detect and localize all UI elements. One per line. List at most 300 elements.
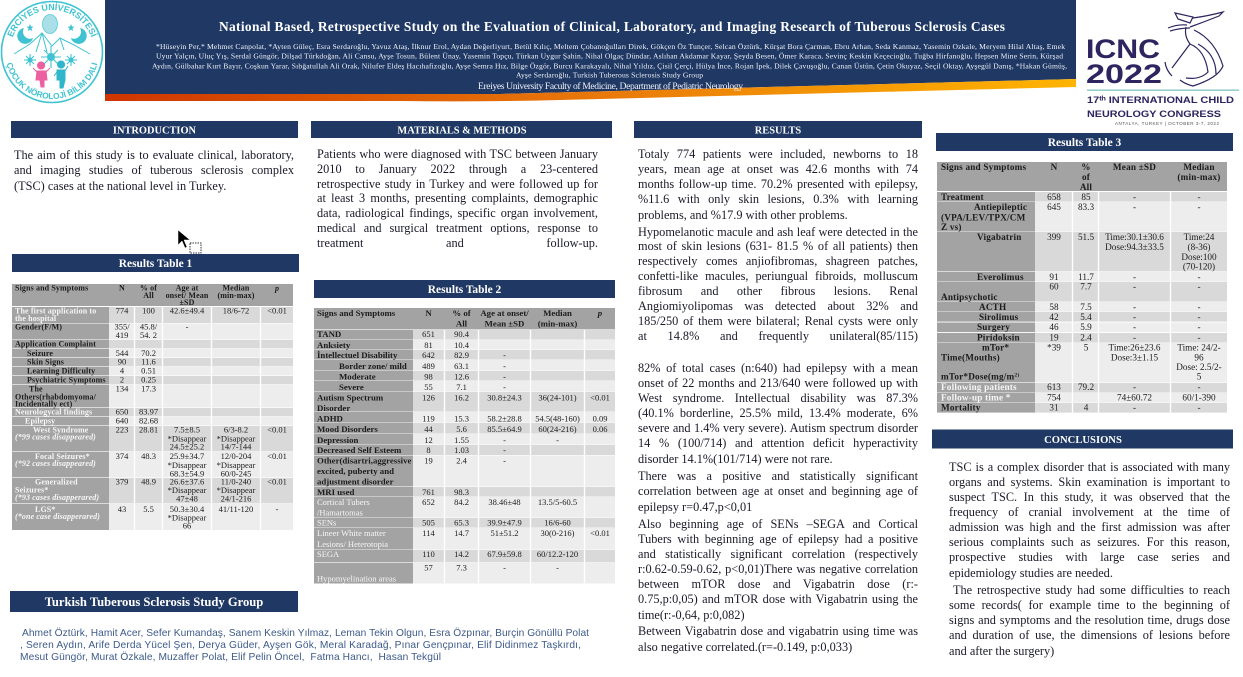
table 2 header: (min-max) — [538, 318, 577, 328]
table 1 rows: 60/0-245 — [221, 468, 251, 478]
table 1 rows: Others(rhabdomyoma/ — [15, 392, 97, 402]
table 3 rows: (8-36) — [1188, 242, 1210, 252]
table 1 rows: 18/6-72 — [223, 306, 249, 316]
text: methods body: at least 3 months, presenting complaints, demographic — [317, 191, 598, 205]
table 1 rows: - — [186, 322, 189, 332]
table 2 rows: - — [503, 562, 506, 572]
text: results paragraph 6 — [638, 624, 918, 654]
table 1 rows: 7.5±8.5 — [174, 424, 200, 434]
table 2 rows: - — [503, 372, 506, 382]
table 1 header: p — [274, 284, 279, 293]
table 3 rows: 51.5 — [1078, 232, 1094, 242]
table 2 rows: 0.06 — [593, 424, 607, 434]
table 2 rows: - — [556, 562, 559, 572]
table 3 rows: 74±60.72 — [1117, 392, 1152, 402]
table 2 header: Age at onset/ — [480, 308, 529, 318]
table 3 rows: Mortality — [941, 402, 981, 412]
table 2 rows: 1.03 — [454, 445, 469, 455]
text: results paragraph 1: months follow-up time. 70.2% presented with epilepsy, — [638, 177, 918, 191]
table 1 rows: *Disappear — [168, 434, 207, 444]
table 2 rows: <0.01 — [590, 392, 610, 402]
table 3 rows: - — [1197, 322, 1201, 332]
table 2 rows: 58.2±28.8 — [487, 414, 522, 424]
table 3 rows: 5.4 — [1080, 312, 1092, 322]
icon: mouse cursor — [178, 230, 201, 253]
table 2 rows: 30(0-216) — [540, 528, 575, 538]
table 1 rows: The first application to — [15, 306, 96, 316]
table 2 header: Mean ±SD — [485, 318, 524, 328]
table 3 rows: mTor*Dose(mg/m — [941, 372, 1014, 382]
heading: conclusions — [932, 430, 1233, 448]
table 1 rows: 134 — [116, 384, 129, 394]
table 3 rows: - — [1197, 202, 1201, 212]
text: conclusions paragraph 1: serious complaints such as seizures. For this reason, — [949, 535, 1230, 549]
table 3 rows: - — [1197, 282, 1201, 292]
table 3 rows: - — [1197, 402, 1201, 412]
text: methods body: 2010 to January 2022 through a 23-centered — [317, 162, 598, 176]
logo: ICNC 2022 congress: ICNC — [1086, 34, 1160, 64]
table 1 rows: 650 — [116, 406, 128, 416]
table 3 header: of — [1082, 172, 1091, 182]
text: study group names: Mesut Güngör, Murat Özkale, Muzaffer Polat, Elif Pelin Öncel, Fatma Hancı, Hasan Tekgül — [20, 651, 441, 663]
table 1 rows: The — [29, 384, 43, 394]
table 2 rows: 55 — [424, 382, 433, 392]
table 2 rows: Anksiety — [317, 340, 351, 350]
table 3 rows: Everolimus — [977, 272, 1024, 282]
table 1 rows: 83.97 — [139, 406, 158, 416]
table 3 rows: Follow-up time * — [941, 392, 1011, 402]
table 3 rows: Dose:100 — [1181, 252, 1217, 262]
table 3 rows: 645 — [1047, 202, 1061, 212]
table 2 rows: 7.3 — [456, 562, 467, 572]
table 2 rows: Hypomyelination areas — [317, 574, 396, 584]
panel: study group — [10, 591, 589, 663]
text: results paragraph 3: 14 % (100/714) and attention deficit hyperactivity — [638, 436, 918, 450]
text: results paragraph 3: (40.1% borderline, 25.5% mild, 13.4% moderate, 6% — [638, 406, 918, 420]
table 2 rows: 65.3 — [454, 518, 469, 528]
text: results paragraph 3: severe and 1.4% very severe). Autism spectrum disorder — [638, 421, 918, 435]
table 2 rows: 90.4 — [454, 329, 470, 339]
table 2 rows: 54.5(48-160) — [535, 414, 580, 424]
table 2 rows: - — [503, 350, 506, 360]
table 1 header: onset/ Mean — [166, 291, 209, 300]
table 2 rows: 505 — [422, 518, 435, 528]
table 2 rows: /Hamartomas — [317, 508, 363, 518]
table 3 rows: Piridoksin — [977, 332, 1020, 342]
text: results paragraph 4: There was a positive and statistically significant — [638, 469, 918, 483]
text: results paragraph 1: %11.6 with only skin lesions, 0.3% with learning — [638, 192, 918, 206]
table 1 rows: 47±48 — [176, 494, 198, 504]
table 3 rows: - — [1197, 382, 1201, 392]
table 3 rows: - — [1197, 272, 1201, 282]
panel: introduction — [11, 121, 298, 193]
text: results paragraph 5: Also beginning age of SENs –SEGA and Cortical — [638, 517, 918, 531]
table 2 rows: 1.55 — [454, 435, 469, 445]
table 1 header: Median — [223, 284, 250, 292]
table 3 rows: 4 — [1084, 402, 1089, 412]
table 2 rows: 82.9 — [454, 350, 469, 360]
table 2 rows: Moderate — [339, 372, 376, 382]
table 2 rows: - — [503, 435, 506, 445]
table 3 rows: - — [1133, 322, 1136, 332]
panel: materials and methods — [311, 121, 612, 252]
table 3 rows: Time:26±23.6 — [1109, 342, 1161, 352]
authors — [152, 42, 1067, 80]
table 3 rows: Vigabatrin — [977, 232, 1022, 242]
table 2 rows: Cortical Tubers — [317, 497, 370, 507]
table 2 rows: 36(24-101) — [538, 392, 577, 402]
table 3 rows: Z vs) — [941, 222, 962, 232]
table 3 rows: 754 — [1047, 392, 1061, 402]
text: results paragraph 4 — [638, 469, 918, 514]
table 3 header: (min-max) — [1177, 172, 1221, 182]
title: National Based, Retrospective Study on the Evaluation of Clinical, Laboratory, and Imaging Research of Tuberous Sclerosis Cases — [219, 19, 1005, 34]
table 3 rows: 60 — [1049, 282, 1059, 292]
table 1 rows: 12/0-204 — [221, 451, 252, 461]
table 2 rows: 12.6 — [454, 372, 469, 382]
table 3 rows: - — [1133, 402, 1136, 412]
table 3 rows: (70-120) — [1183, 262, 1215, 272]
table 2 rows: 0.09 — [593, 414, 607, 424]
table 1 rows: 24.5±25.2 — [170, 442, 204, 452]
table 1 rows: 26.6±37.6 — [170, 476, 204, 486]
table 3 rows: Time:30.1±30.6 — [1105, 232, 1164, 242]
text: conclusions paragraph 1: TSC is a complex disorder that is associated with many — [949, 460, 1230, 474]
table 1 rows: Seizures* — [15, 486, 48, 494]
table 1 rows: 48.3 — [141, 451, 156, 461]
table 2 rows: Severe — [339, 382, 364, 392]
table 3 rows: - — [1133, 192, 1136, 202]
table 2 rows: adjustment disorder — [317, 476, 394, 486]
table 2 header — [314, 308, 615, 329]
table 3 rows: 83.3 — [1078, 202, 1094, 212]
text: conclusions paragraph 2: some records( for example time to the beginning of — [949, 598, 1230, 612]
table 2 rows: 14.2 — [454, 549, 469, 559]
table 2 rows: Lineer White matter — [317, 528, 386, 538]
heading: introduction — [11, 121, 298, 138]
text: results paragraph 3: disorder 14.1%(101/714) were not rare. — [638, 452, 833, 466]
table 1 rows: <0.01 — [267, 424, 287, 434]
table 2 rows: - — [503, 382, 506, 392]
table 1 rows: Neurologycal findings — [15, 408, 92, 416]
panel: conclusions — [932, 430, 1233, 658]
table 2 header: All — [456, 318, 468, 328]
table 2 header: Signs and Symptoms — [317, 308, 396, 318]
text: conclusions paragraph 2: and duration of use, the dimensions of lesions before — [949, 628, 1230, 642]
text: results paragraph 2: fibrosum and other fibrous lesions. Renal — [638, 284, 918, 298]
table 1 rows: (*99 cases disappeared) — [15, 432, 96, 442]
table 1 rows: *Disappear — [168, 512, 207, 522]
table 2 rows: 652 — [422, 497, 435, 507]
table 2 rows: SENs — [317, 518, 336, 528]
table 2 rows: 16/6-60 — [544, 518, 571, 528]
table 2 rows: Mood Disorders — [317, 424, 378, 434]
heading: study group — [10, 591, 298, 612]
logo: ICNC 2022 congress — [1086, 12, 1239, 126]
text: methods body: data, radiological findings, specific organ involvement, — [317, 206, 598, 220]
heading: introduction: INTRODUCTION — [113, 126, 197, 136]
table 1 header: % of — [140, 284, 157, 292]
table 1 rows: 66 — [183, 520, 191, 530]
table 1 header: Age at — [176, 284, 199, 292]
table 2 rows: 14.7 — [454, 528, 469, 538]
table 3 rows: Surgery — [977, 322, 1010, 332]
table 3 rows: Treatment — [941, 192, 985, 202]
table 1 rows: 43 — [118, 504, 126, 514]
heading: results table 2 — [314, 280, 615, 298]
table 1 rows: 68.3±54.9 — [170, 468, 204, 478]
table 2 rows: 12 — [424, 435, 433, 445]
table 2 rows: TAND — [317, 329, 341, 339]
table 3 rows: (VPA/LEV/TPX/CM — [941, 212, 1026, 222]
logo: ICNC 2022 congress: NEUROLOGY CONGRESS — [1087, 109, 1222, 120]
text: results paragraph 4: epilepsy r=0.47,p<0,01 — [638, 500, 752, 514]
text: results paragraph 5: between mTOR dose and Vigabatrin dose (r:- — [638, 577, 918, 591]
table 3 rows: *39 — [1047, 342, 1061, 352]
table 3 header — [937, 162, 1227, 192]
table 3 rows: ACTH — [979, 302, 1006, 312]
logo: ICNC 2022 congress: 17ᵗʰ INTERNATIONAL CHILD — [1087, 95, 1234, 106]
affiliation: Ereiyes University Faculty of Medicine, Department of Pediatric Neurology — [478, 81, 743, 92]
table 2 rows — [314, 329, 615, 584]
table 2 rows: - — [503, 456, 506, 466]
table 1 rows: 379 — [116, 476, 128, 486]
table 3 rows: Time:24 — [1184, 232, 1215, 242]
table 3 rows: Dose:3±1.15 — [1111, 352, 1158, 362]
table 1 header: (min-max) — [217, 291, 255, 300]
table 3 rows: Dose:94.3±33.5 — [1105, 242, 1164, 252]
authors: Ayşe Serdaroğlu, Turkish Tuberous Sclerosis Study Group — [516, 70, 703, 80]
table 2 rows: 761 — [422, 487, 435, 497]
table 1 rows: 82.68 — [139, 416, 158, 426]
heading: results table 1: Results Table 1 — [119, 258, 193, 270]
table 3 rows: Antipsychotic — [941, 292, 998, 302]
heading: results table 2: Results Table 2 — [428, 284, 502, 296]
table 1 rows: 6/3-8.2 — [224, 424, 248, 434]
table 3 rows: - — [1133, 332, 1136, 342]
table 1 rows: 14/7-144 — [221, 442, 252, 452]
table 3 rows: 2.4 — [1080, 332, 1092, 342]
text: results paragraph 2: most of skin lesions (631- 81.5 % of all patients) then — [638, 239, 918, 253]
table 1 header: ±SD — [180, 298, 195, 307]
text: results paragraph 2: Hypomelanotic macule and ash leaf were detected in the — [638, 225, 918, 239]
table 2 rows: excited, puberty and — [317, 466, 394, 476]
text: results paragraph 1: problems, and %17.9 with other problems. — [638, 208, 848, 222]
table 3 rows: - — [1197, 302, 1201, 312]
table 3 rows: 31 — [1049, 402, 1059, 412]
authors: Uyur Yalçın, Uluç Yış, Serdal Güngör, Dilşad Türkdoğan, Ali Cansu, Ayşe Tosun, Bülent Ünay, Yasemin Topçu, Türkan Uygur Şahin, Nihal Olgaç Dündar, Aslıhan Akdamar Kayar, Şeyda Besen, Ömer Karaca, Sevinç Keskin Keçecioğlu, Tuğba Hirfanoğlu, Hepsen Mine Serin, Kürşad — [156, 52, 1063, 60]
table 3 header: % — [1081, 162, 1091, 172]
text: study group names: Ahmet Öztürk, Hamit Acer, Sefer Kumandaş, Sanem Keskin Yılmaz, Leman Tekin Olgun, Esra Özpınar, Burçin Gönüllü Polat — [22, 627, 589, 639]
table 3 rows: 5.9 — [1080, 322, 1092, 332]
table 1 rows: 774 — [116, 306, 129, 316]
text: conclusions paragraph 1: suspect TSC. In this study, it was observed that the — [949, 490, 1230, 504]
table 1 rows: 100 — [142, 306, 155, 316]
table 1 rows: *Disappear — [168, 460, 207, 470]
table 2 header: N — [425, 308, 432, 318]
text: methods body — [317, 147, 598, 252]
table 1 rows: Learning Difficulty — [27, 366, 95, 376]
logo: ICNC 2022 congress: 2022 — [1086, 59, 1162, 89]
header banner — [105, 0, 1076, 101]
table 2 rows: 15.3 — [454, 414, 469, 424]
text: results paragraph 5: time(r:-0,64, p:0,082) — [638, 608, 745, 622]
panel: results table 2 — [314, 280, 615, 584]
text: conclusions paragraph 1 — [949, 460, 1230, 580]
text: introduction body — [14, 148, 294, 193]
heading: study group: Turkish Tuberous Sclerosis Study Group — [45, 595, 263, 609]
text: methods body: retrospective study in Turkey and were followed up for — [317, 177, 598, 191]
table 3 rows: - — [1197, 312, 1201, 322]
text: methods body: treatment and follow-up. — [317, 236, 598, 250]
heading: results: RESULTS — [755, 126, 801, 136]
table 3 rows: - — [1133, 202, 1136, 212]
table 3 rows: mTor* — [982, 342, 1009, 352]
table 1 rows: 25.9±34.7 — [170, 451, 204, 461]
table 3 rows: 46 — [1049, 322, 1059, 332]
table 2 rows: 51±51.2 — [490, 528, 519, 538]
text: results paragraph 2: at 14.8% and frequently unilateral(85/115) — [638, 329, 918, 343]
table 2 rows: 114 — [422, 528, 435, 538]
table 2 rows: Other(disartri,aggressive — [317, 456, 411, 466]
table 2 rows: MRI used — [317, 487, 354, 497]
table 2 rows: Decreased Self Esteem — [317, 445, 402, 455]
table 3 rows: 11.7 — [1078, 272, 1094, 282]
text: results paragraph 5: and statistically significant correlation (respectively — [638, 547, 918, 561]
table 1 rows: <0.01 — [267, 451, 287, 461]
table 3 rows: - — [1197, 332, 1201, 342]
table 1 rows: 223 — [116, 424, 128, 434]
table 3 rows: - — [1133, 302, 1136, 312]
table 2 rows: 8 — [426, 445, 431, 455]
table 1 — [12, 284, 293, 530]
table 2 rows: 2.4 — [456, 456, 468, 466]
text: results paragraph 2: 185/250 of them were bilateral; Renal cysts were only — [638, 314, 918, 328]
table 2 rows: 85.5±64.9 — [487, 424, 522, 434]
table 2 rows: Lesions/ Heterotopia — [317, 539, 388, 549]
authors: Aydın, Gülbahar Kurt Bayır, Coşkun Yarar, Sıbğatullah Ali Orak, Nilufer Eldeş Hacıhafizoğlu, Ayşe Semra Hız, Bilge Özgör, Burcu Karakayalı, Nihal Yıldız, Çisil Çerçi, Hülya İnce, Rojan İpek, Dilek Çavuşoğlu, Canan Üstün, Çetin Okuyaz, Seçil Oktay, Ayşegül Danış, *Hakan Gümüş, — [152, 62, 1067, 70]
table 1 rows: <0.01 — [267, 306, 287, 316]
table 2 rows: Autism Spectrum — [317, 392, 384, 402]
text: results paragraph 3: onset of 22 months and 213/640 were followed up with — [638, 376, 918, 390]
table 2 rows: 7.1 — [456, 382, 467, 392]
table 2 rows: - — [503, 445, 506, 455]
table 1 rows: the hospital — [15, 314, 57, 323]
table 1 rows: Skin Signs — [27, 358, 64, 366]
text: conclusions paragraph 1: admission was high and the first admission was after — [949, 520, 1230, 534]
panel: results table 3 — [936, 133, 1233, 413]
table 1 rows: 24/1-216 — [221, 494, 251, 504]
text: results paragraph 5: 0.75,p:0,05) and mTOR dose with Vigabatrin using the — [638, 592, 918, 606]
table 1 rows: 42.6±49.4 — [170, 306, 205, 316]
text: conclusions paragraph 1: organs and systems. Skin examination is important to — [949, 475, 1230, 489]
logo: Erciyes University pediatric neurology: ÇOCUK NÖROLOJİ BİLİM DALI — [6, 62, 98, 99]
table 3 — [937, 162, 1227, 413]
table 3 rows: 42 — [1049, 312, 1059, 322]
table 1 rows: 355/ — [114, 322, 130, 332]
text: results paragraph 1: Totaly 774 patients were included, newborns to 18 — [638, 147, 918, 161]
table 3 rows: Sirolimus — [979, 312, 1019, 322]
text: conclusions paragraph 2: and after the surgery) — [949, 644, 1054, 658]
text: results paragraph 3: 82% of total cases (n:640) had epilepsy with a mean — [638, 361, 918, 375]
table 1 rows: 70.2 — [141, 348, 156, 358]
table 3 rows: - — [1133, 282, 1136, 292]
text: results paragraph 5 — [638, 517, 918, 622]
table 3 rows: Time(Mouths) — [941, 352, 1000, 362]
table 1 rows: *Disappear — [217, 434, 256, 444]
table 1 rows: 28.81 — [139, 424, 158, 434]
text: conclusions paragraph 2: The retrospective study had some difficulties to reach — [953, 583, 1230, 597]
table 1 rows: 4 — [120, 366, 125, 376]
table 1 header: Signs and Symptoms — [15, 284, 88, 292]
table 1 rows: (*92 cases disappeared) — [15, 459, 96, 468]
text: conclusions paragraph 1: epidemiology studies are needed. — [949, 566, 1113, 580]
table 1 rows: <0.01 — [267, 476, 287, 486]
table 3 rows: - — [1133, 312, 1136, 322]
table 3 rows: 5 — [1084, 342, 1089, 352]
table 2 rows: İntellectuel Disability — [317, 350, 398, 360]
text: results paragraph 5: r:0.62-0.59-0.62, p<0,01)There was negative correlation — [638, 562, 918, 576]
table 2 rows: 13.5/5-60.5 — [538, 497, 577, 507]
authors: *Hüseyin Per,* Mehmet Canpolat, *Ayten Güleç, Esra Serdaroğlu, Yavuz Ataş, İlknur Erol, Aydan Değerliyurt, Betül Kılıç, Meltem Çobanoğulları Direk, Gökçen Öz Tunçer, Selcan Öztürk, Kürşat Bora Çarman, Ebru Arhan, Seda Kanmaz, Yasemin Ozkale, Meryem Hilal Altaş, Emek — [156, 42, 1065, 51]
table 1 header: All — [143, 291, 154, 300]
table 1 rows: 419 — [116, 330, 128, 340]
table 2 rows: 63.1 — [454, 361, 469, 371]
table 2 rows: 38.46±48 — [488, 497, 521, 507]
table 3 rows: 7.7 — [1080, 282, 1092, 292]
panel: results — [634, 121, 922, 654]
table 2 rows: 57 — [424, 562, 433, 572]
table 2 rows: 16.2 — [454, 392, 469, 402]
table 2 rows: 642 — [422, 350, 435, 360]
text: results paragraph 1: years, mean age at onset was 42.6 months with 74 — [638, 162, 918, 176]
table 3 rows: Time: 24/2- — [1177, 342, 1221, 352]
table 1 rows: - — [276, 504, 279, 514]
table 1 rows: 374 — [116, 451, 129, 461]
table 3 rows: 19 — [1049, 332, 1059, 342]
text: results paragraph 6: Between Vigabatrin dose and vigabatrin using time was — [638, 624, 918, 638]
text: conclusions paragraph 1: prospective studies with large case series and — [949, 550, 1230, 564]
table 2 rows: 98 — [424, 372, 433, 382]
logo: ICNC 2022 congress: ANTALYA, TURKEY | OCTOBER 3-7, 2022 — [1115, 121, 1219, 126]
table 1 rows: 54. 2 — [140, 330, 157, 340]
table 3 rows: Following patients — [941, 382, 1017, 392]
table 1 rows: Incidentally ect) — [15, 400, 73, 408]
text: introduction body: (TSC) cases at the national level in Turkey. — [14, 179, 226, 193]
text: introduction body: and imaging studies of tuberous sclerosis complex — [14, 163, 294, 177]
text: results paragraph 2: confetti-like macules, periungual fibroids, molluscum — [638, 269, 918, 283]
table 2 rows: 98.3 — [454, 487, 469, 497]
table 2 rows: 39.9±47.9 — [487, 518, 522, 528]
table 3 rows: 399 — [1047, 232, 1061, 242]
text: study group names: , Seren Aydın, Arife Derda Yücel Şen, Derya Güder, Ayşen Gök, Meral Karadağ, Pınar Gençpınar, Elif Didinmez Taşkırdı, — [20, 640, 581, 651]
table 3 rows: 85 — [1081, 192, 1091, 202]
text: conclusions paragraph 2 — [949, 583, 1230, 658]
table 3 rows: 60/1-390 — [1182, 392, 1216, 402]
table 3 header: Signs and Symptoms — [941, 162, 1027, 172]
table 2 rows: - — [503, 361, 506, 371]
table 2 — [314, 308, 615, 584]
text: conclusions paragraph 1: frequency of cranial involvement at the time of — [949, 505, 1230, 519]
table 1 rows: 0.25 — [141, 374, 156, 384]
heading: results table 3 — [936, 133, 1233, 151]
table 1 rows: *Disappear — [217, 485, 256, 495]
text: results paragraph 1 — [638, 147, 918, 222]
table 3 rows — [937, 192, 1227, 413]
table 2 rows: Border zone/ mild — [339, 361, 407, 371]
table 1 rows: (*one case disapperared) — [15, 512, 100, 521]
table 2 rows: 60(24-216) — [538, 424, 577, 434]
